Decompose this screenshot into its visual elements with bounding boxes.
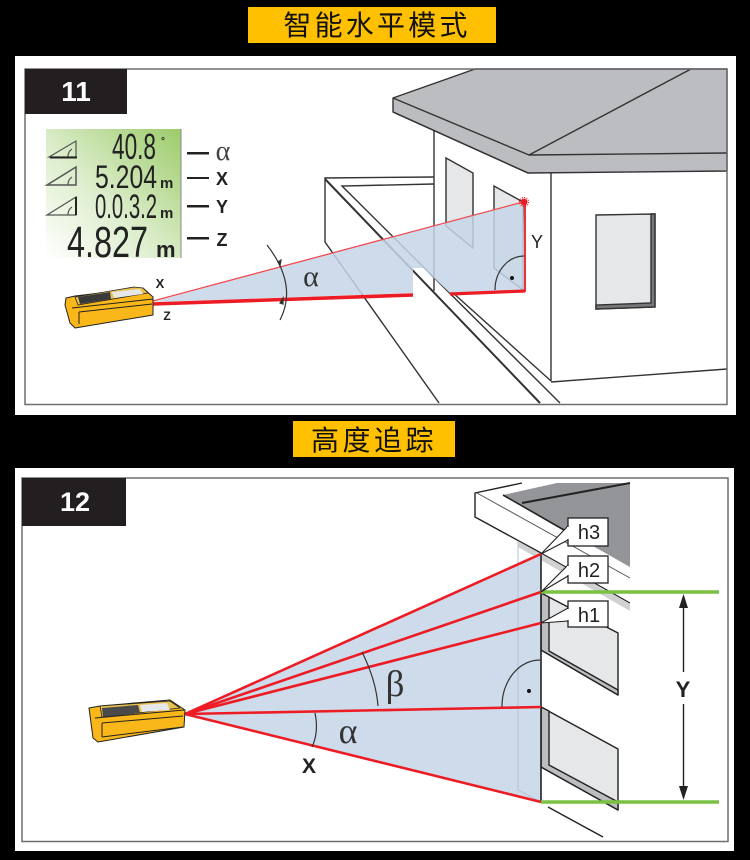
house roof <box>393 69 727 173</box>
step tab 11: 11 <box>61 76 91 107</box>
LCD units: m <box>160 175 173 192</box>
label alpha: α <box>303 260 319 293</box>
LCD readings: 5.204 <box>95 159 157 195</box>
LCD units: m <box>160 205 173 222</box>
height arrow Y <box>676 594 691 800</box>
house windows <box>446 158 655 309</box>
right angle mark <box>495 256 524 290</box>
panel frame <box>25 69 727 404</box>
red laser rays <box>185 554 541 802</box>
title: smart level mode: 智能水平模式 <box>283 10 471 41</box>
LCD units: ° <box>161 136 165 147</box>
angle arc alpha <box>312 713 316 747</box>
icon: laser meter <box>65 287 153 328</box>
red laser lines <box>153 197 529 304</box>
label alpha: α <box>339 711 358 751</box>
panel frame <box>22 478 728 842</box>
title: height tracking: 高度追踪 <box>311 425 437 456</box>
callout h1: h1 <box>578 605 600 627</box>
LCD legend: Y <box>216 197 228 217</box>
device labels: X <box>156 276 165 291</box>
label beta: β <box>386 664 404 705</box>
right angle mark <box>502 660 540 707</box>
house walls <box>434 131 727 382</box>
LCD units: m <box>156 237 176 262</box>
LCD readings: 4.827 <box>67 218 148 267</box>
building windows <box>541 593 618 837</box>
building roof <box>475 483 630 611</box>
panel: step 12 <box>15 468 734 851</box>
LCD readings: 0.0.3.2 <box>95 188 157 226</box>
callout h3: h3 <box>578 522 600 544</box>
LCD units <box>156 136 176 262</box>
angle arc alpha <box>267 245 287 320</box>
balcony <box>325 177 560 403</box>
step tab 12: 12 <box>60 487 90 517</box>
callout h1 <box>541 601 608 627</box>
angle arc beta <box>362 652 378 706</box>
step tab 12 <box>22 478 126 526</box>
device labels <box>156 276 171 323</box>
device labels: Z <box>163 309 171 323</box>
LCD icons <box>47 141 77 215</box>
callout h2 <box>541 556 608 592</box>
LCD legend <box>187 136 231 250</box>
panel: step 11 <box>15 56 736 415</box>
title: smart level mode <box>248 7 496 43</box>
LCD display <box>46 126 181 267</box>
title: height tracking <box>293 421 455 457</box>
LCD legend: X <box>216 169 228 189</box>
LCD readings: 40.8 <box>112 126 156 167</box>
step tab 11 <box>25 69 127 114</box>
label X: X <box>302 755 316 778</box>
LCD readings <box>67 126 157 267</box>
height arrow Y: Y <box>676 677 691 702</box>
wall edges <box>518 541 541 802</box>
green height lines <box>541 592 719 802</box>
icon: laser meter <box>89 700 185 742</box>
callout h3 <box>541 518 608 554</box>
callout h2: h2 <box>578 560 600 582</box>
measurement plane <box>153 202 525 302</box>
LCD legend: α <box>216 136 231 167</box>
LCD legend: Z <box>216 230 228 250</box>
measurement plane <box>185 554 541 802</box>
label Y: Y <box>531 232 543 252</box>
